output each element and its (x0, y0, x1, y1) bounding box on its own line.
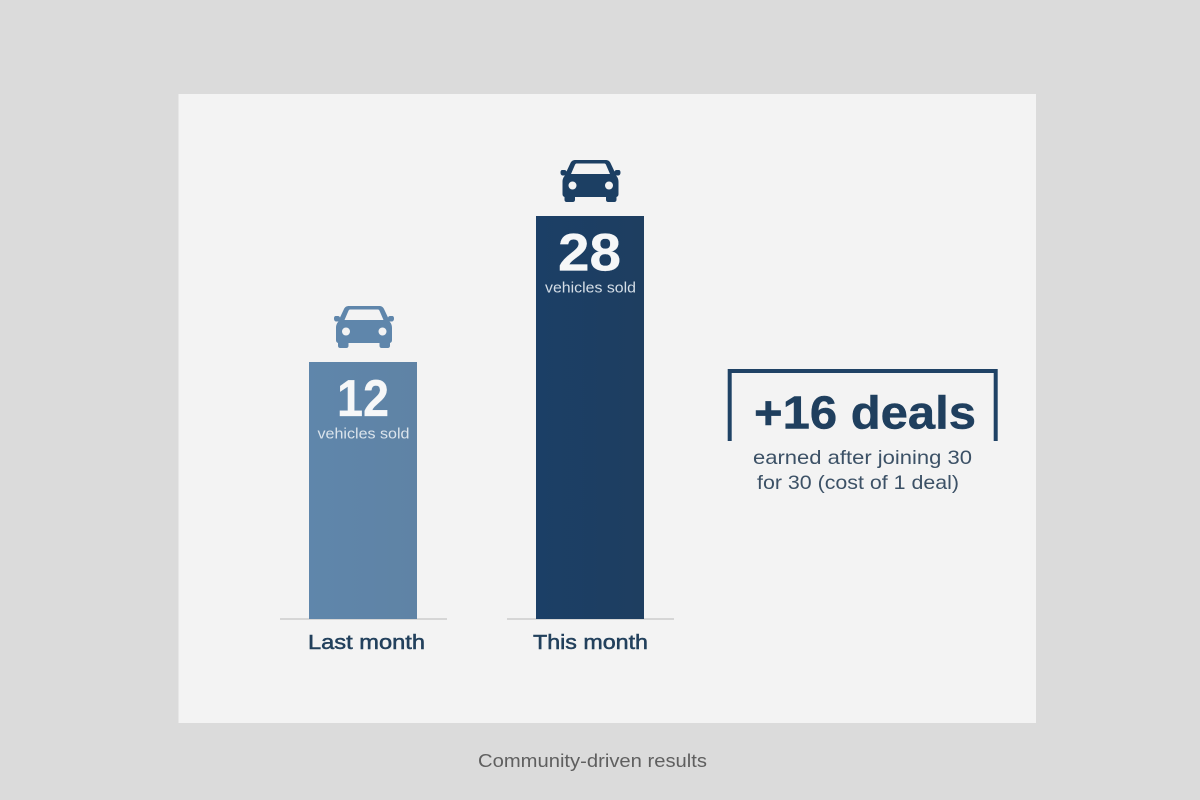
bar: last month (309, 362, 417, 619)
axis label: last month: Last month (308, 632, 425, 654)
bar chart: monthly vehicles sold (280, 160, 674, 654)
callout description: for 30 (cost of 1 deal) (757, 472, 959, 494)
this month bar group (507, 160, 674, 654)
callout description (753, 447, 972, 494)
callout: deals gained (730, 371, 996, 494)
icon: car, this month (560, 160, 620, 202)
unit label: this month: vehicles sold (545, 280, 636, 296)
unit label: last month: vehicles sold (318, 426, 410, 442)
callout headline: +16 deals (754, 386, 976, 438)
callout bracket (730, 371, 996, 441)
icon: car, last month (334, 306, 394, 348)
axis label: this month: This month (533, 632, 648, 654)
value: 28: 28 (558, 224, 621, 282)
panel: chart card (178, 94, 1036, 723)
bar: this month (536, 216, 644, 619)
callout description: earned after joining 30 (753, 447, 972, 469)
caption: Community-driven results (478, 751, 707, 771)
last month bar group (280, 306, 447, 654)
value: 12: 12 (337, 370, 389, 428)
